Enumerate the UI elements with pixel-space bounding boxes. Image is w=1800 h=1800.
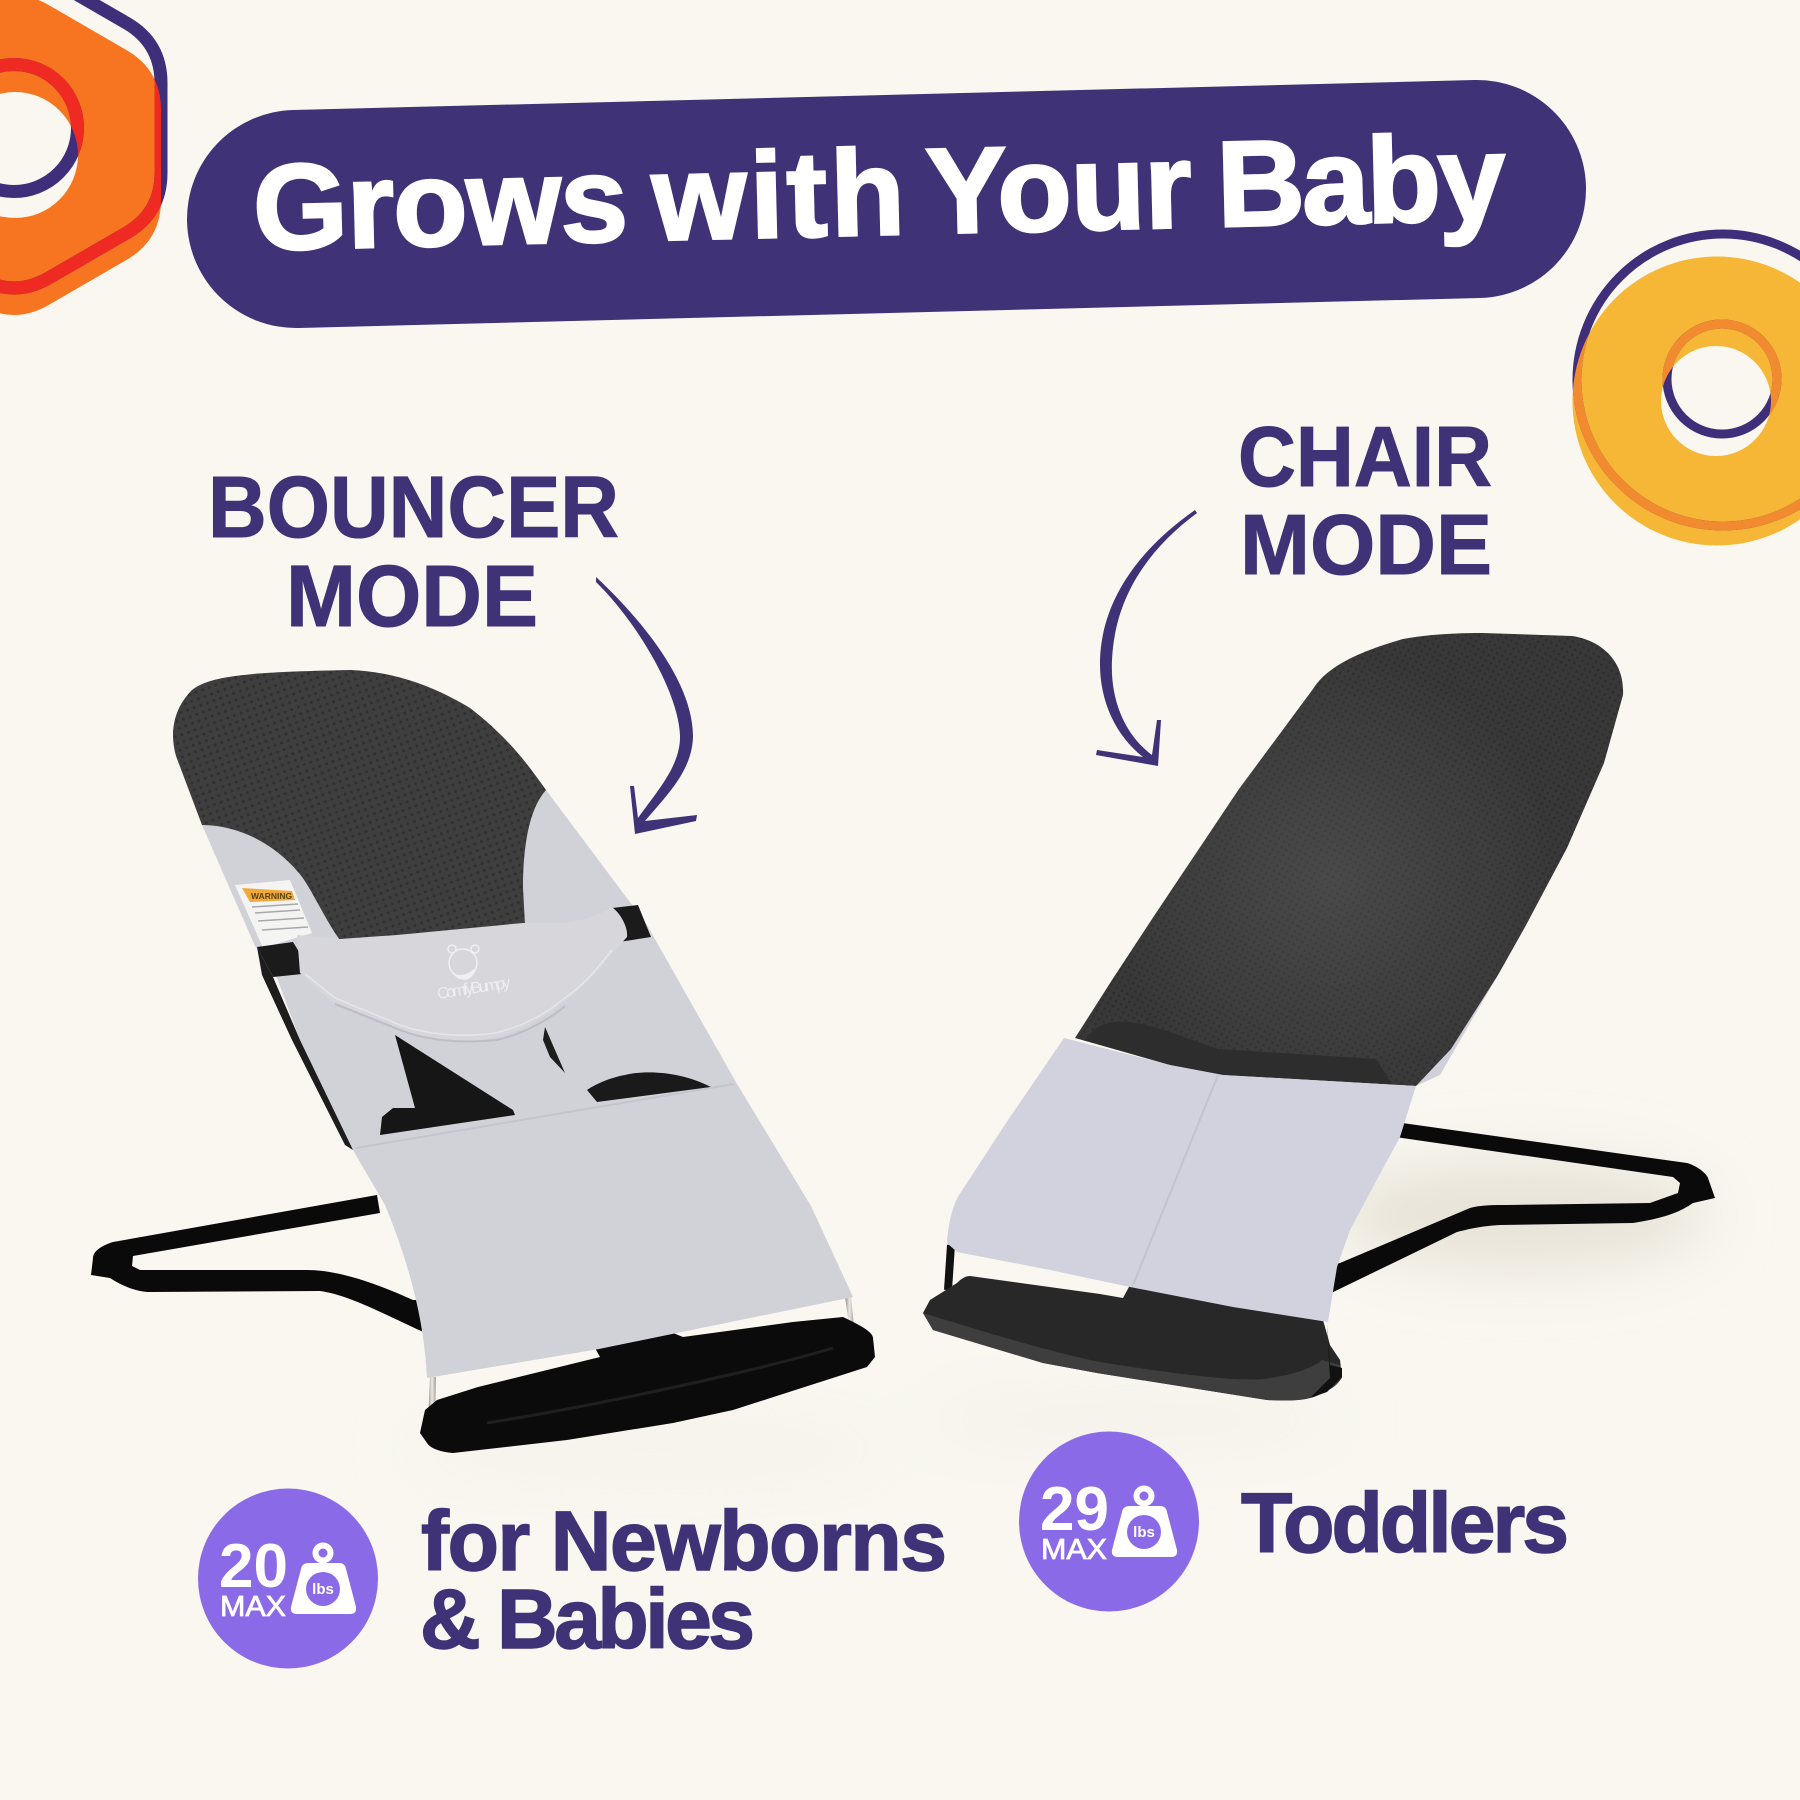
chair fabric panel bbox=[947, 1038, 1416, 1322]
title banner: with bbox=[649, 124, 906, 266]
bib shadow bbox=[335, 1004, 565, 1042]
label: bouncer mode: MODE bbox=[286, 548, 538, 645]
chair seat fold bbox=[1085, 1022, 1392, 1084]
bib padding bbox=[297, 907, 627, 1041]
chair base tray bbox=[923, 1276, 1342, 1401]
title banner: Your bbox=[924, 117, 1193, 260]
label: bouncer mode: BOUNCER bbox=[208, 459, 619, 556]
badge: 20 lbs max bbox=[198, 1488, 378, 1668]
chair seat illustration bbox=[923, 633, 1715, 1401]
badge: 29 lbs max: MAX bbox=[1041, 1534, 1107, 1566]
chair strut bbox=[948, 1245, 951, 1290]
label: bouncer mode bbox=[208, 459, 619, 645]
icon: weight 20: lbs bbox=[312, 1581, 334, 1598]
bib stitching bbox=[305, 950, 612, 1035]
badge: 29 lbs max bbox=[1019, 1432, 1199, 1612]
leg opening sliver bbox=[543, 1027, 565, 1073]
brand logo bbox=[436, 945, 512, 1003]
decorative donut ring bbox=[1573, 234, 1800, 546]
warning label bbox=[235, 880, 312, 948]
bouncer seat illustration bbox=[91, 670, 875, 1453]
caption: newborns and babies: for Newborns bbox=[421, 1494, 947, 1588]
caption: newborns and babies bbox=[420, 1494, 947, 1666]
pocket seam bbox=[356, 1084, 734, 1148]
caption: newborns and babies: & Babies bbox=[420, 1572, 755, 1666]
arrow: to chair bbox=[1096, 510, 1197, 766]
badge: 29 lbs max: 29 bbox=[1040, 1475, 1109, 1544]
bouncer fabric seat bbox=[202, 790, 853, 1378]
bouncer mesh headrest bbox=[173, 670, 546, 940]
brand logo: ComfyBumpy bbox=[436, 975, 512, 1003]
floor shadows bbox=[410, 1160, 1710, 1470]
icon: weight 20 bbox=[291, 1546, 356, 1614]
chair wire frame bbox=[1325, 1122, 1715, 1296]
icon: weight 29: lbs bbox=[1133, 1524, 1155, 1541]
leg opening right bbox=[587, 1072, 711, 1102]
badge: 20 lbs max: 20 bbox=[219, 1532, 288, 1601]
bouncer buckles bbox=[257, 905, 651, 977]
title banner: Grows bbox=[251, 131, 630, 276]
chair mesh back bbox=[1075, 633, 1623, 1086]
label: chair mode bbox=[1238, 410, 1492, 593]
decorative hexagon nut bbox=[0, 0, 161, 315]
chair fabric seam bbox=[1133, 1075, 1218, 1285]
bouncer side shadow strip bbox=[257, 947, 353, 1150]
warning label: WARNING bbox=[251, 891, 292, 901]
caption: toddlers: Toddlers bbox=[1241, 1476, 1569, 1570]
bouncer metal legs bbox=[428, 1297, 854, 1428]
label: chair mode: MODE bbox=[1240, 498, 1492, 593]
chair side fabric sliver bbox=[1416, 975, 1498, 1086]
icon: weight 29 bbox=[1112, 1488, 1177, 1557]
leg opening left bbox=[380, 1035, 515, 1135]
badge: 20 lbs max: MAX bbox=[220, 1591, 286, 1623]
chair mesh highlight bbox=[1075, 633, 1623, 1086]
bouncer wire frame bbox=[91, 1195, 435, 1335]
bouncer base tray bbox=[420, 1317, 875, 1453]
title banner: Baby bbox=[1215, 109, 1507, 252]
title banner bbox=[251, 109, 1507, 276]
label: chair mode: CHAIR bbox=[1238, 410, 1492, 505]
arrow: to bouncer bbox=[596, 577, 697, 834]
